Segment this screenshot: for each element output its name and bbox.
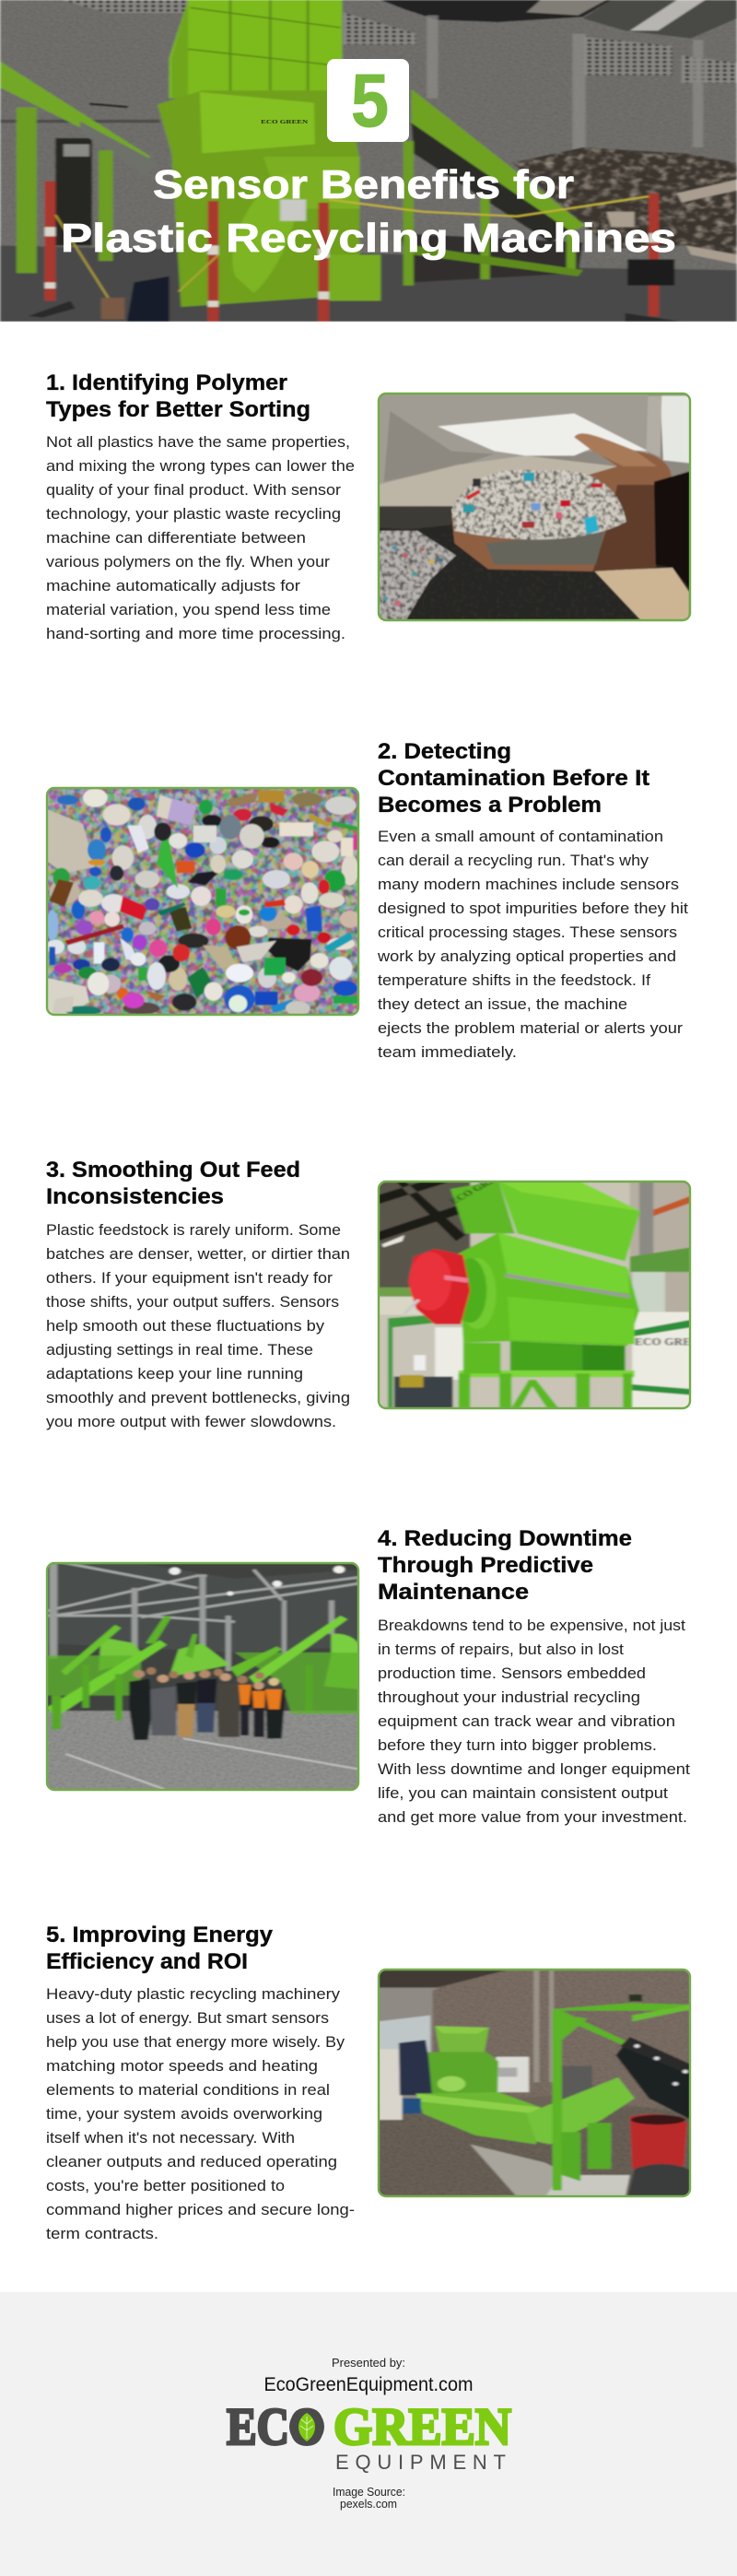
body text: machine can differentiate between [46,529,306,547]
conveyors [0,62,150,166]
body text: help you use that energy more wisely. By [46,2033,345,2051]
photo: hand holding shredded plastic [378,393,691,621]
body text: costs, you're better positioned to [46,2177,285,2194]
body text: uses a lot of energy. But smart sensors [46,2009,329,2027]
heading: 2. Detecting [378,739,511,764]
body text: production time. Sensors embedded [378,1664,646,1682]
heading [46,371,310,422]
debris [512,147,737,254]
badge: number 5 [327,59,409,143]
body text [377,828,688,1061]
website: EcoGreenEquipment.com [263,2374,474,2395]
body text: adaptations keep your line running [46,1365,303,1382]
body text: you more output with fewer slowdowns. [46,1413,336,1430]
body text: life, you can maintain consistent output [378,1784,668,1802]
title [61,162,676,261]
photo: green shredder with red gearbox [378,1176,691,1409]
body text: With less downtime and longer equipment [378,1760,690,1778]
image source: Image Source: [333,2485,405,2499]
body text: itself when it's not necessary. With [46,2129,295,2147]
heading: Efficiency and ROI [46,1949,248,1974]
body [459,1232,639,1346]
machine [435,2026,489,2053]
body text: smoothly and prevent bottlenecks, giving [46,1389,350,1406]
heading: Inconsistencies [46,1184,224,1209]
body text: hand-sorting and more time processing. [46,625,345,642]
body text: cleaner outputs and reduced operating [46,2153,337,2170]
presented by: Presented by: [332,2356,405,2370]
body text: work by analyzing optical properties and [377,947,676,965]
panel: benefit 2 [46,739,688,1061]
body text: Even a small amount of contamination [378,828,663,845]
body text: elements to material conditions in real [46,2081,330,2099]
body text: term contracts. [46,2225,158,2242]
heading: 1. Identifying Polymer [46,371,287,395]
image frame 4 [47,1563,358,1790]
photo: team in front of green conveyors [46,1562,359,1791]
body text: in terms of repairs, but also in lost [378,1641,624,1658]
people [129,1678,286,1740]
body text: team immediately. [378,1043,517,1061]
panel: benefit 1 [46,371,691,642]
photo: pile of plastic bottles [46,787,360,1016]
photo: shredder machine in warehouse [0,0,737,322]
panel: benefit 3 [46,1158,691,1430]
body text: temperature shifts in the feedstock. If [378,971,650,989]
body text: adjusting settings in real time. These [46,1341,313,1359]
heading [378,1526,632,1605]
badge: number 5: 5 [351,59,389,143]
body text: can derail a recycling run. That's why [378,852,649,869]
logo: Eco Green Equipment: ECO [227,2398,324,2456]
body text: batches are denser, wetter, or dirtier than [46,1245,350,1263]
heading: Becomes a Problem [378,793,602,817]
hopper [498,1181,640,1261]
hopper [170,0,342,99]
photo: green shredder with red gearbox: ECO GRE [448,1176,498,1206]
body text: critical processing stages. These sensors [378,923,677,941]
logo: Eco Green Equipment: EQUIPMENT [335,2451,506,2474]
panel: footer [0,2292,737,2576]
body text: Not all plastics have the same properties, [46,433,350,451]
body text: designed to spot impurities before they hit [378,900,688,917]
image frame 3 [379,1182,690,1408]
body text [46,1985,355,2242]
body text: quality of your final product. With sensor [46,481,341,499]
heading: Types for Better Sorting [46,397,310,422]
heading: 5. Improving Energy [46,1923,274,1947]
heading: Contamination Before It [378,766,649,791]
body text: equipment can track wear and vibration [378,1712,675,1730]
image frame 1 [379,394,690,620]
panel: benefit 4 [46,1526,690,1826]
logo: Eco Green Equipment [227,2398,511,2474]
image source: pexels.com [340,2497,397,2511]
body text: technology, your plastic waste recycling [46,505,341,523]
photo: shredder machine in warehouse: ECO GREEN [261,118,309,124]
body text: matching motor speeds and heating [46,2057,318,2075]
machine body [158,90,359,307]
heading [378,739,649,817]
body text [46,433,355,642]
image source [333,2485,405,2511]
body text: various polymers on the fly. When your [46,553,330,570]
title: Sensor Benefits for [153,162,574,207]
body text: throughout your industrial recycling [378,1688,640,1706]
heading [46,1158,300,1209]
body text: others. If your equipment isn't ready for [46,1269,333,1287]
photo: green baler in brick warehouse [378,1969,691,2197]
image frame 5 [379,1970,690,2196]
body text: time, your system avoids overworking [46,2105,322,2123]
body text [378,1617,690,1826]
body text: material variation, you spend less time [46,601,331,618]
body text: Heavy-duty plastic recycling machinery [46,1985,341,2003]
heading: Through Predictive [378,1553,593,1578]
body text: many modern machines include sensors [378,876,679,893]
body text: they detect an issue, the machine [378,995,627,1013]
heading: 4. Reducing Downtime [378,1526,632,1551]
body text: before they turn into bigger problems. [378,1736,657,1754]
body text: Breakdowns tend to be expensive, not just [378,1617,685,1634]
logo: Eco Green Equipment: GREEN [333,2398,511,2456]
title: Plastic Recycling Machines [61,216,676,261]
body text: those shifts, your output suffers. Sensors [46,1293,339,1311]
image frame 2 [47,788,358,1015]
body text: machine automatically adjusts for [46,577,300,594]
body text: ejects the problem material or alerts your [378,1019,683,1037]
body text: and mixing the wrong types can lower the [46,457,355,475]
heading: 3. Smoothing Out Feed [46,1158,300,1182]
body text: and get more value from your investment. [378,1808,687,1826]
body text: command higher prices and secure long- [46,2201,355,2218]
panel: hero banner [0,0,737,322]
poles [44,181,659,322]
heading: Maintenance [378,1580,529,1605]
body text [46,1221,350,1430]
body text: Plastic feedstock is rarely uniform. Some [46,1221,341,1239]
heading [46,1923,274,1974]
panel: benefit 5 [46,1923,691,2242]
body text: help smooth out these fluctuations by [46,1317,325,1335]
